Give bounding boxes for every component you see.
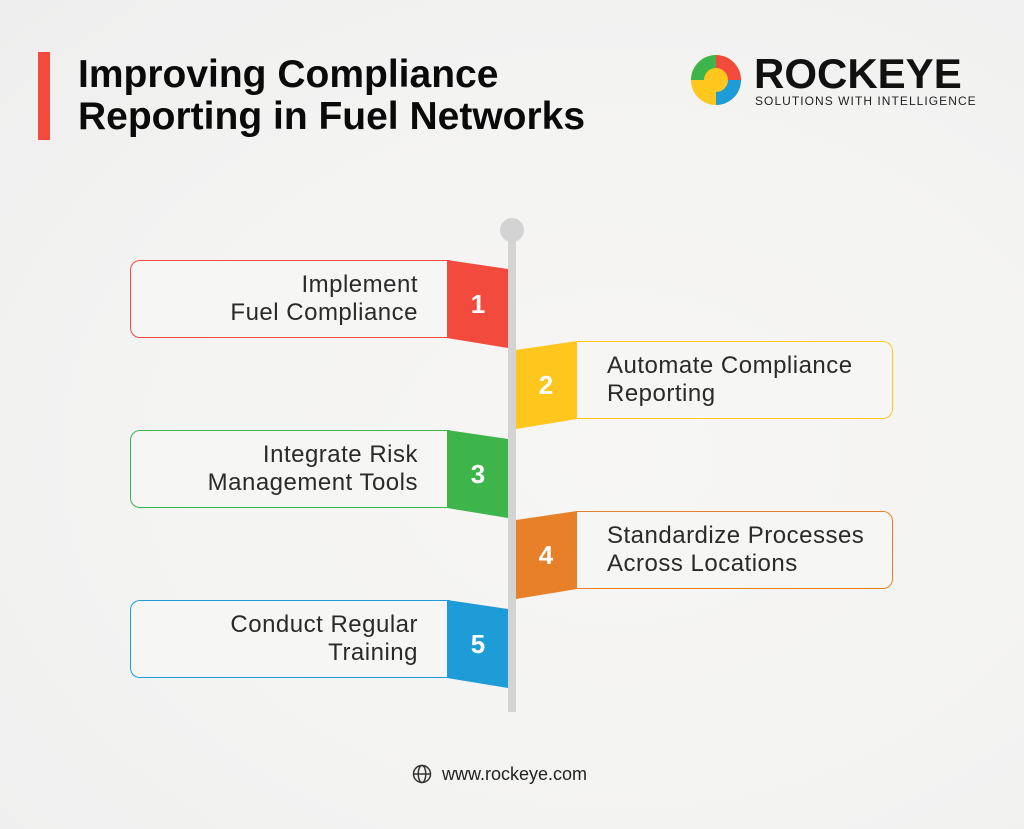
step 1 xyxy=(130,260,450,338)
footer website: www.rockeye.com xyxy=(442,764,587,784)
text: 4 xyxy=(539,540,554,570)
step 3 xyxy=(130,430,450,508)
step 4: Across Locations xyxy=(607,550,798,577)
step 2: Automate Compliance xyxy=(607,352,853,379)
step 5: Conduct Regular xyxy=(230,611,418,638)
pole xyxy=(500,218,524,242)
logo text: ROCKEYE xyxy=(754,50,962,97)
logo: SOLUTIONS WITH INTELLIGENCE xyxy=(755,94,977,108)
logo xyxy=(691,50,977,108)
icon: globe xyxy=(412,764,432,784)
step 2: Reporting xyxy=(607,380,716,407)
title xyxy=(78,53,585,138)
title accent bar xyxy=(38,52,50,140)
title: Reporting in Fuel Networks xyxy=(78,95,585,138)
icon: logo swirl xyxy=(691,55,741,105)
text: 5 xyxy=(471,629,485,659)
title: Improving Compliance xyxy=(78,53,498,96)
text: 3 xyxy=(471,459,485,489)
step 1: Fuel Compliance xyxy=(230,299,418,326)
step 3: Integrate Risk xyxy=(263,441,418,468)
step 4 xyxy=(577,511,893,589)
step 3: Management Tools xyxy=(208,469,418,496)
step 5: Training xyxy=(328,639,418,666)
step 4: Standardize Processes xyxy=(607,522,864,549)
text: 1 xyxy=(471,289,485,319)
step 2 xyxy=(577,341,893,419)
step 5 xyxy=(130,600,450,678)
text: 2 xyxy=(539,370,553,400)
step 1: Implement xyxy=(301,271,418,298)
